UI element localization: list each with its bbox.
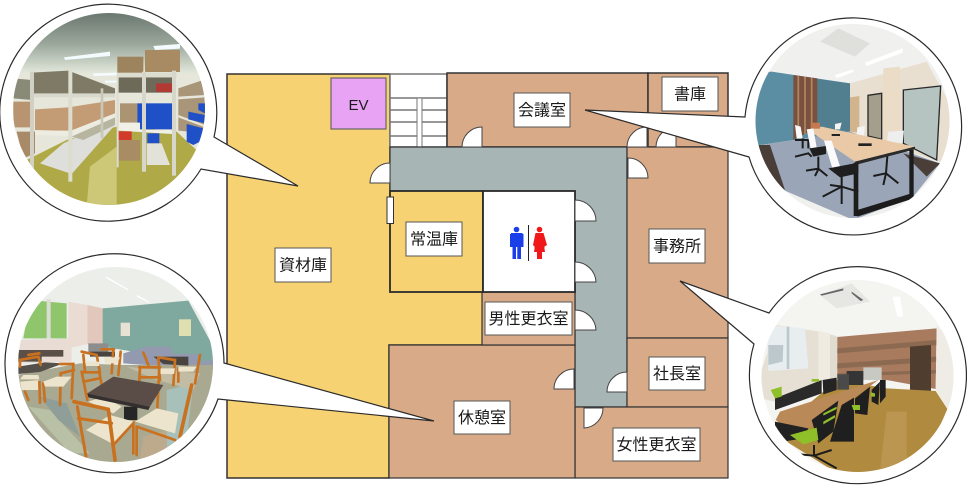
photo: rest room	[17, 267, 217, 467]
photo: office	[760, 278, 957, 475]
label: president office	[649, 357, 705, 390]
main table	[87, 377, 163, 407]
callout: storage photo	[0, 4, 298, 221]
callout: office photo	[680, 267, 966, 484]
room labels	[275, 77, 718, 461]
doors	[370, 127, 676, 428]
label: president office: 社長室	[653, 365, 701, 383]
callout: rest room photo	[5, 254, 434, 473]
room: toilet	[483, 191, 575, 292]
label: material storage	[275, 248, 331, 282]
callout bubble	[585, 18, 962, 235]
label: meeting room	[514, 93, 570, 127]
label: archive: 書庫	[674, 86, 706, 104]
icon: man	[510, 227, 524, 259]
photo: storage shelves	[10, 10, 210, 210]
corridor	[390, 147, 627, 407]
callout bubble	[0, 4, 298, 221]
label: male changing room	[485, 302, 572, 335]
room: stairs	[390, 74, 447, 147]
room: ambient storage	[390, 191, 483, 292]
label: office: 事務所	[653, 238, 701, 256]
room: office	[627, 147, 728, 338]
callout bubble	[5, 254, 434, 473]
label: ambient storage: 常温庫	[410, 230, 458, 248]
label: female changing room	[613, 428, 700, 461]
room: female changing room	[575, 407, 728, 478]
label: rest room	[454, 401, 510, 434]
icon: toilet	[510, 225, 547, 261]
divider	[528, 225, 529, 261]
chairs front	[807, 128, 817, 149]
elevator label: EV	[348, 97, 369, 114]
photo: meeting room	[753, 20, 953, 220]
room: president office	[627, 338, 728, 407]
room: elevator	[331, 78, 386, 129]
table	[808, 127, 915, 162]
label: material storage: 資材庫	[279, 256, 327, 274]
far chairs	[82, 349, 200, 385]
near chairs	[86, 415, 134, 445]
small white door slot	[387, 197, 394, 224]
floor plan	[227, 73, 728, 478]
room: material storage	[227, 74, 483, 478]
label: rest room: 休憩室	[458, 409, 506, 427]
room: meeting room	[447, 73, 648, 147]
room: male changing room	[482, 292, 575, 345]
label: female changing room: 女性更衣室	[616, 436, 697, 454]
room: rest room	[389, 345, 575, 478]
label: archive	[662, 77, 718, 111]
callout: meeting room photo	[585, 18, 962, 235]
label: ambient storage	[406, 222, 462, 256]
room: archive	[648, 73, 728, 147]
icon: woman	[533, 227, 547, 259]
chairs behind	[795, 125, 803, 138]
label: meeting room: 会議室	[518, 102, 566, 120]
callout bubble	[680, 267, 966, 484]
label: male changing room: 男性更衣室	[488, 310, 569, 328]
label: office	[649, 229, 705, 263]
